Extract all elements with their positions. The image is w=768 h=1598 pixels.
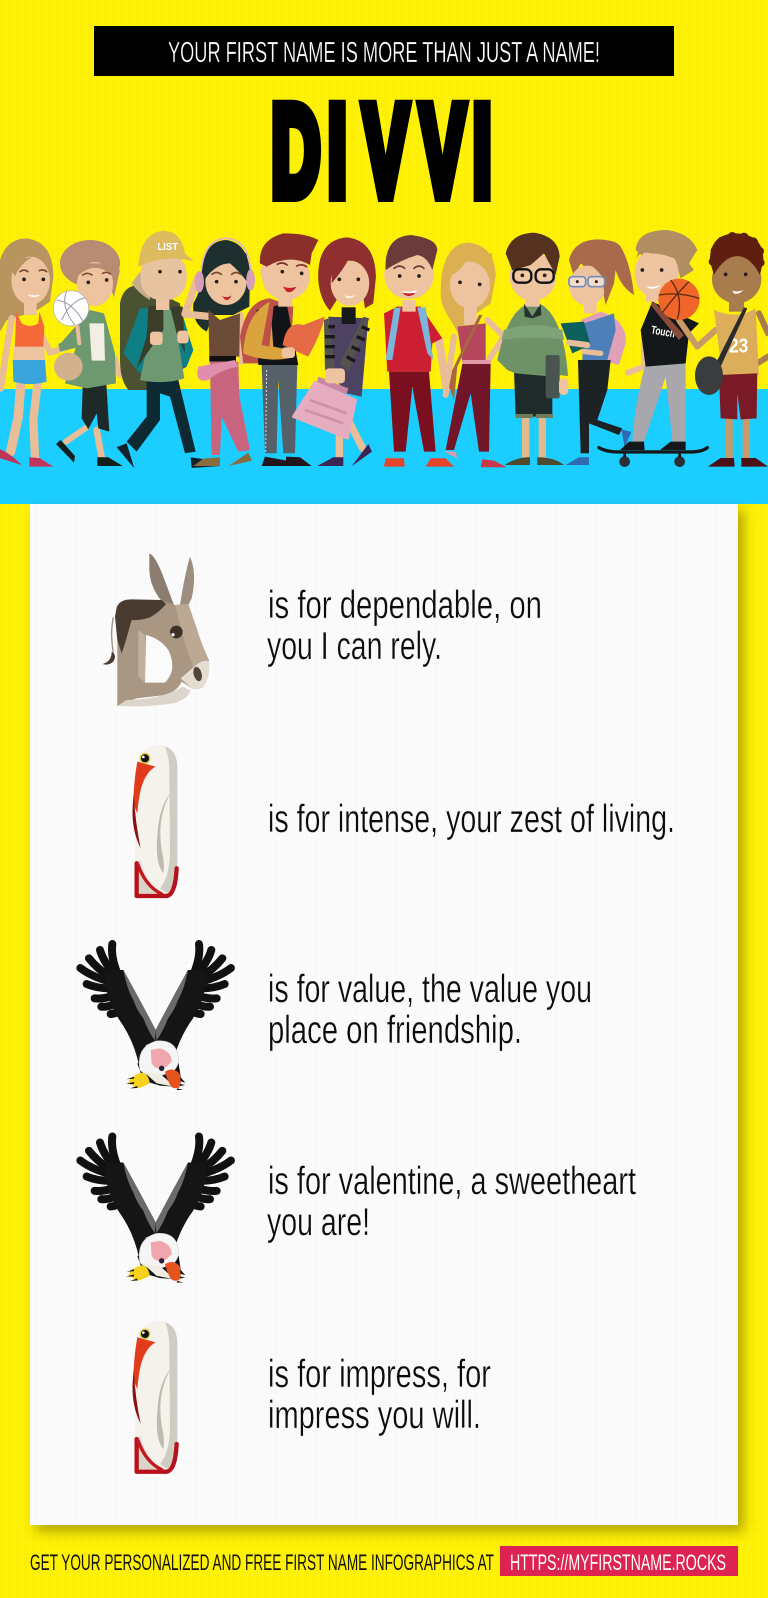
icon: donkey letter D — [103, 553, 209, 706]
person: boy with glasses — [497, 233, 568, 465]
person: blonde girl — [441, 243, 507, 467]
text: second I line — [268, 1353, 491, 1437]
blue floor band — [0, 389, 768, 504]
person: boy on skateboard with basketball: Touch — [650, 324, 676, 340]
panel shadow — [36, 510, 744, 1532]
person: boy with tank top and shoulder bag: 23 — [729, 336, 748, 358]
panel: name meanings — [30, 504, 738, 1525]
title: name: DIVVI — [271, 79, 491, 223]
icon: stork letter I (second) — [132, 1321, 177, 1472]
icon: vulture letter V (second) — [80, 1136, 231, 1282]
text: V line: place on friendship. — [268, 1009, 522, 1052]
text: V line: is for value, the value you — [268, 968, 592, 1011]
person: girl with pink case — [293, 237, 376, 466]
icon: vulture letter V — [80, 944, 231, 1090]
person: boy in red shirt — [384, 235, 454, 467]
person: girl with headphones — [185, 238, 255, 466]
person: girl with volleyball — [53, 240, 123, 466]
top banner — [94, 26, 674, 76]
text: D line — [267, 584, 542, 668]
text: D line: you I can rely. — [267, 625, 442, 668]
text: second V line — [267, 1160, 636, 1244]
people illustration — [0, 230, 768, 468]
text: second V line: is for valentine, a sweetheart — [268, 1160, 636, 1203]
text: second I line: is for impress, for — [268, 1353, 491, 1396]
text: second I line: impress you will. — [268, 1394, 481, 1437]
text: V line — [268, 968, 592, 1052]
person: girl with tablet — [561, 239, 634, 465]
text: second V line: you are! — [267, 1201, 370, 1244]
icon: stork letter I — [132, 745, 177, 896]
person: girl in orange top — [0, 238, 77, 467]
person: boy with cap and backpack — [117, 231, 220, 468]
text: D line: is for dependable, on — [268, 584, 542, 627]
person: boy on skateboard with basketball — [599, 230, 716, 467]
person: boy with tank top and shoulder bag — [695, 232, 768, 467]
person: boy with cap and backpack: LIST — [157, 242, 178, 253]
footer call to action: GET YOUR PERSONALIZED AND FREE FIRST NAME INFOGRAPHICS AT — [30, 1550, 494, 1575]
person: boy with book — [240, 233, 325, 466]
